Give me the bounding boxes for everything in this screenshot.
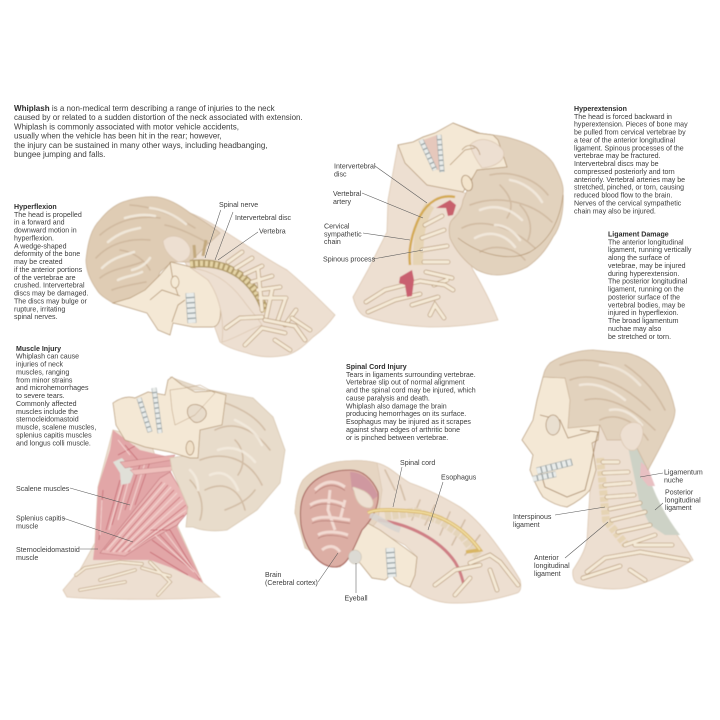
text block: hyperextension: anteriorly. Vertebral arteries may be [574,177,685,184]
text block: ligament damage: be stretched or torn. [608,334,671,341]
teeth [139,388,160,433]
text block: hyperextension: The head is forced backward in [574,114,672,121]
teeth [390,548,392,577]
text block: muscle injury: splenius capitis muscles [16,432,92,439]
labels: spinal cord injury: Spinal cord [400,460,435,467]
brain [300,470,378,567]
labels: spinal cord injury: (Cerebral cortex) [265,580,318,587]
labels: ligament damage [513,470,703,578]
text block: hyperflexion: A wedge-shaped [14,243,67,250]
text block: muscle injury: Whiplash can cause [16,354,79,361]
text block: hyperflexion: hyperflexion. [14,236,54,242]
text block: hyperextension: vertebrae may be fractured. [574,153,661,160]
text block: spinal cord injury: producing hemorrhages on its surface. [346,411,466,418]
text block: hyperflexion: if the anterior portions [14,267,83,274]
text block: spinal cord injury: against sharp edges of arthritic bone [346,427,460,434]
labels: ligament damage: longitudinal [665,498,701,504]
illustration: muscle injury [63,377,285,599]
text block: hyperflexion: deformity of the bone [14,251,80,258]
text block: ligament damage: vertebral bodies, may be [608,302,685,309]
labels: ligament damage: Interspinous [513,514,552,521]
text block: muscle injury: Muscle Injury [16,346,61,353]
text block: muscle injury: from minor strains [16,377,73,384]
teeth [421,135,442,172]
text block: ligament damage [608,232,692,341]
illustration: spinal cord injury [295,461,521,603]
labels: ligament damage: Ligamentum [664,470,703,476]
text block: hyperextension: a tear of the anterior longitudinal [574,138,676,144]
text block: hyperflexion: may be created [14,259,63,266]
text block: ligament damage: ligament, running vertically [608,247,692,254]
labels: hyperflexion: Intervertebral disc [235,215,291,222]
illustration: hyperflexion [86,197,335,357]
labels: hyperflexion [205,202,291,260]
text block: ligament damage: posterior surface of the [608,294,680,302]
labels: spinal cord injury: Brain [265,572,282,579]
text block: spinal cord injury: Spinal Cord Injury [346,364,407,371]
text block: muscle injury: muscles, ranging [16,369,69,376]
text block: muscle injury: Commonly affected [16,401,77,408]
text block: hyperextension: Nerves of the cervical sympathetic [574,200,682,208]
labels: muscle injury: muscle [16,555,38,562]
labels: hyperflexion: Vertebra [259,228,286,236]
vertebrae [583,458,688,580]
muscles [93,430,203,583]
text block: muscle injury: to severe tears. [16,393,65,400]
teeth [533,462,572,479]
illustration: ligament damage [522,350,693,589]
text block: muscle injury: and longus colli muscle. [16,440,91,447]
text block: hyperflexion: rupture, irritating [14,306,65,313]
text block: muscle injury: sternocleidomastoid [16,417,79,424]
labels: spinal cord injury: Esophagus [441,474,477,482]
text block: ligament damage: vetebrae, may be injured [608,263,686,270]
text block: ligament damage: nuchae may also [608,326,661,333]
labels: ligament damage: ligament [534,571,561,578]
text block: muscle injury [16,346,96,447]
text block: hyperflexion: spinal nerves. [14,314,58,321]
esophagus [378,520,464,585]
text block: ligament damage: during hyperextension. [608,271,679,278]
text block: muscle injury: muscle, scalene muscles, [16,424,96,432]
labels: muscle injury: Scalene muscles [16,486,70,493]
text block: muscle injury: and microhemorrhages [16,385,89,392]
labels: ligament damage: longitudinal [534,563,570,570]
labels: spinal cord injury [265,460,477,602]
text block: ligament damage: injured in hyperflexion. [608,310,679,317]
labels: spinal cord injury: Eyeball [344,596,368,602]
text block: hyperflexion: downward motion in [14,228,77,235]
text block: hyperextension: be pulled from cervical vertebrae by [574,130,686,137]
intro text block: usually when the vehicle has been hit in the rear; however, [14,132,222,141]
vertebrae and spinal cord [368,510,518,595]
text block: ligament damage: ligament, running on the [608,287,684,294]
text block: hyperextension: ligament. Spinous processes of the [574,145,684,152]
teeth [190,293,192,323]
text block: hyperextension [574,106,688,215]
text block: hyperextension: stretched, pinched, or torn, causing [574,185,684,192]
text block: hyperextension: hyperextension. Pieces of bone may [574,122,688,129]
text block: ligament damage: The broad ligamentum [608,318,679,325]
labels: muscle injury: Sternocleidomastoid [16,547,80,554]
text block: spinal cord injury: Whiplash also damage the brain [346,403,447,410]
text block: hyperextension: chain may also be injured. [574,208,656,215]
text block: hyperextension: Intervertebral discs may be [574,161,659,168]
labels: hyperextension: Cervical [324,224,350,230]
labels: muscle injury: muscle [16,524,38,530]
labels: ligament damage: ligament [665,505,692,512]
text block: hyperextension: compressed posteriorly and torn [574,169,675,176]
text block: spinal cord injury: Esophagus may be injured as it scrapes [346,419,471,426]
text block: hyperflexion: in a forward and [14,220,65,227]
text block: hyperflexion [14,204,88,321]
text block: spinal cord injury: or is pinched between vertebrae. [346,435,448,442]
intro text block: Whiplash is commonly associated with motor vehicle accidents, [14,122,239,131]
labels: ligament damage: Posterior [665,490,694,496]
text block: spinal cord injury [346,364,476,442]
spine [190,240,310,350]
labels: hyperextension [323,164,427,264]
labels: hyperextension: artery [333,199,351,206]
labels: hyperextension: sympathetic [324,232,362,238]
text block: ligament damage: The anterior longitudinal [608,239,684,246]
text block: hyperextension: Hyperextension [574,106,627,113]
labels: hyperextension: Intervertebral [334,164,376,170]
labels: muscle injury [16,486,133,562]
text block: hyperflexion: The discs may bulge or [14,298,88,306]
labels: hyperextension: disc [334,172,347,178]
labels: hyperextension: chain [324,239,341,246]
spine [366,196,456,318]
text block: hyperflexion: discs may be damaged. [14,291,88,298]
text block: ligament damage: Ligament Damage [608,232,669,238]
text block: spinal cord injury: Vertebrae slip out of normal alignment [346,380,465,387]
text block: hyperflexion: of the vertebrae are [14,275,76,282]
text block: ligament damage: along the surface of [608,255,670,262]
labels: muscle injury: Splenius capitis [16,516,65,522]
text block: ligament damage: The posterior longitudinal [608,279,688,286]
intro text block: bungee jumping and falls. [14,150,105,159]
text block: hyperflexion: Hyperflexion [14,204,57,211]
intro text block: the injury can be sustained in many other ways, including headbanging, [14,141,268,150]
text block: spinal cord injury: and the spinal cord may be injured, which [346,388,476,395]
text block: hyperflexion: crushed. Intervertebral [14,283,85,290]
labels: ligament damage: nuche [664,478,683,484]
intro text block [14,104,303,159]
text block: spinal cord injury: Tears in ligaments surrounding vertebrae. [346,372,476,379]
text block: hyperflexion: The head is propelled [14,212,82,219]
labels: hyperextension: Vertebral [333,191,362,198]
text block: muscle injury: injuries of neck [16,362,63,368]
intro text block: caused by or related to a sudden distortion of the neck associated with extension. [14,113,303,122]
labels: hyperflexion: Spinal nerve [219,202,258,209]
intro text block: Whiplash is a non-medical term describing a range of injuries to the neck [14,104,276,113]
illustration: hyperextension [353,123,563,327]
labels: ligament damage: ligament [513,522,540,529]
text block: spinal cord injury: cause paralysis and death. [346,396,430,402]
text block: muscle injury: muscles include the [16,409,78,416]
labels: ligament damage: Anterior [534,555,559,562]
labels: hyperextension: Spinous process [323,256,376,264]
text block: hyperextension: reduced blood flow to the brain. [574,193,672,200]
ribs [76,562,170,595]
